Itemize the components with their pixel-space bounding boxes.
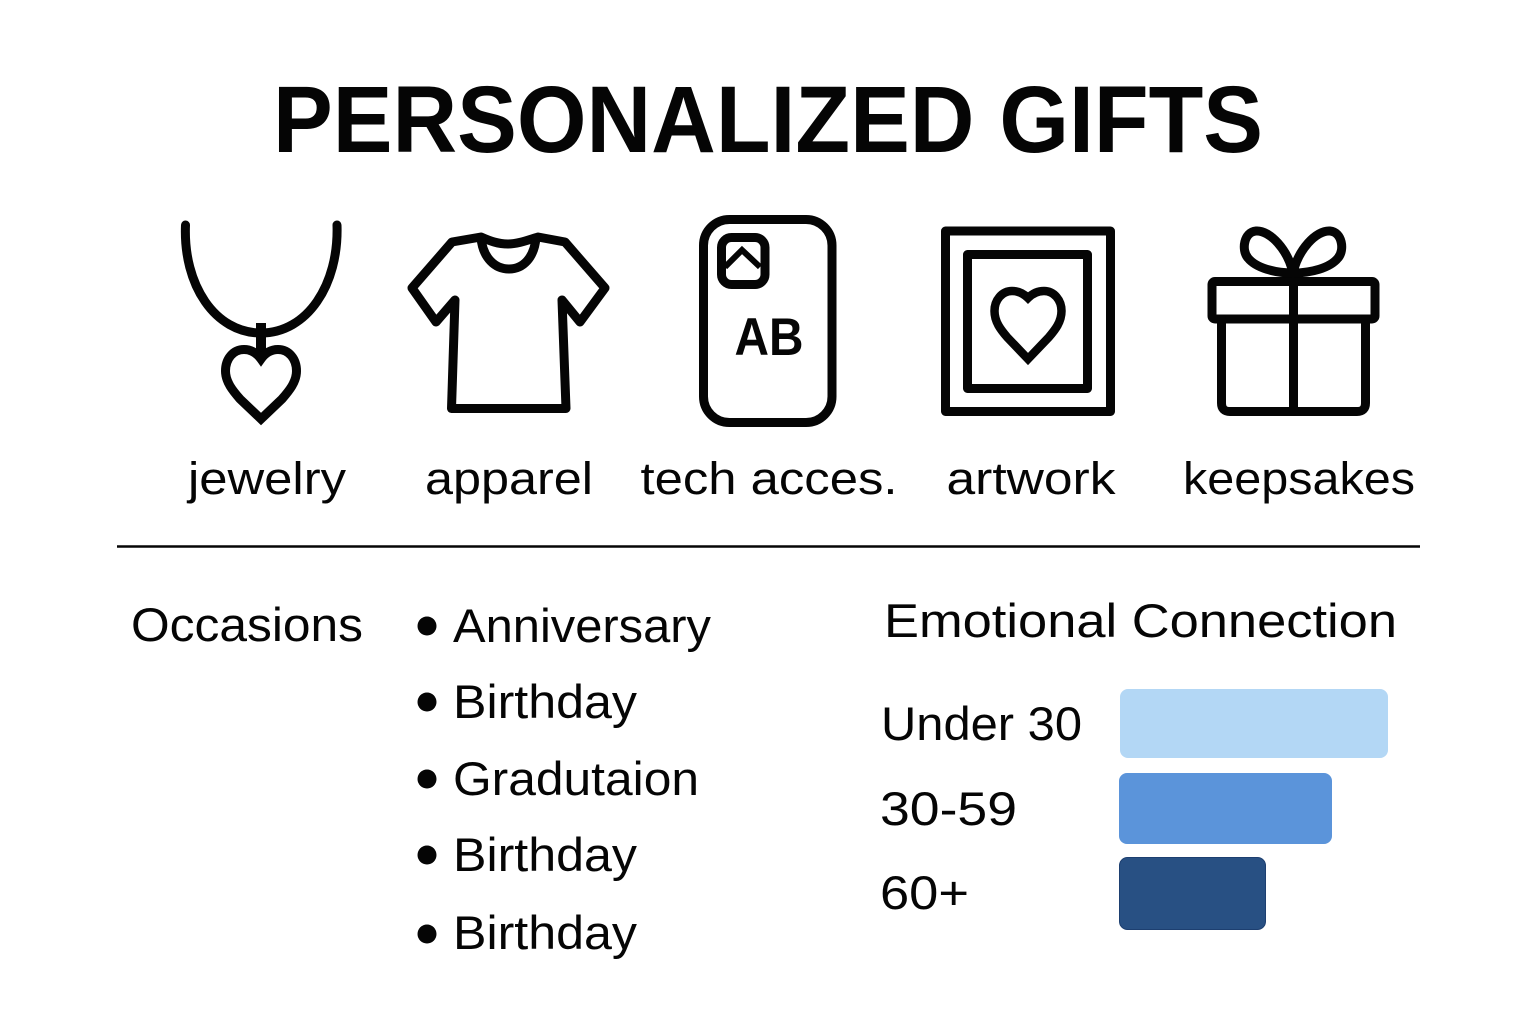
bar: 60+	[880, 858, 1266, 930]
bar: 30-59	[880, 773, 1332, 844]
icon: phone case	[704, 220, 832, 422]
occasions list	[418, 599, 712, 959]
icon: phone case: AB	[734, 308, 804, 367]
bar: 30-59: 30-59	[880, 782, 1017, 835]
icon: necklace with heart pendant	[185, 225, 337, 419]
heading: emotional connection: Emotional Connection	[884, 594, 1397, 647]
icon: t-shirt	[412, 237, 605, 408]
icon: framed heart artwork	[946, 231, 1110, 412]
title: PERSONALIZED GIFTS	[273, 67, 1263, 173]
bar: 60+: 60+	[880, 866, 969, 919]
list item: Birthday: Birthday	[453, 675, 638, 728]
list item: Anniversary: Anniversary	[453, 599, 712, 652]
heading: occasions: Occasions	[131, 598, 363, 651]
label: keepsakes: keepsakes	[1183, 453, 1415, 504]
label: tech accessories: tech acces.	[640, 453, 898, 504]
label: jewelry: jewelry	[186, 453, 347, 504]
list item: Gradutaion: Gradutaion	[453, 752, 699, 805]
bar: Under 30	[881, 689, 1388, 758]
bar: Under 30: Under 30	[881, 697, 1082, 750]
list item: Birthday: Birthday	[453, 828, 638, 881]
list item: Birthday: Birthday	[453, 906, 638, 959]
label: artwork: artwork	[946, 453, 1116, 504]
icon: gift box	[1212, 231, 1375, 412]
bar chart: emotional connection by age	[880, 689, 1388, 930]
label: apparel: apparel	[425, 453, 593, 504]
